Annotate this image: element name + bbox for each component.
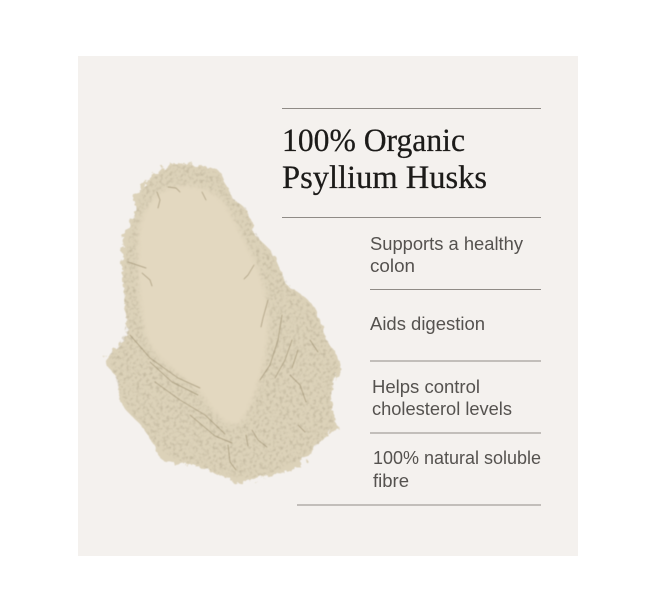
- title: 100% Organic: [282, 123, 465, 159]
- benefit: soluble fibre: fibre: [373, 471, 409, 491]
- powder cracks: [128, 187, 318, 470]
- heading rule: bottom: [282, 216, 541, 218]
- title: Psyllium Husks: [282, 160, 487, 196]
- image: psyllium powder pile: [106, 163, 341, 482]
- benefit: cholesterol: Helps control: [372, 377, 480, 397]
- benefit: soluble fibre: [297, 448, 541, 505]
- benefit: digestion: Aids digestion: [370, 314, 485, 334]
- powder grain texture: [108, 165, 339, 478]
- benefit: soluble fibre: 100% natural soluble: [373, 448, 541, 468]
- panel: background: [78, 56, 578, 556]
- title: [282, 123, 487, 196]
- benefit: cholesterol: [370, 377, 541, 433]
- benefit: cholesterol: cholesterol levels: [372, 399, 512, 419]
- benefit: healthy colon: colon: [370, 256, 415, 276]
- powder outer mound: [106, 163, 341, 482]
- smooth pressed centre: [137, 185, 268, 425]
- benefit: healthy colon: [370, 234, 541, 290]
- heading rule: top: [282, 108, 541, 110]
- benefit: healthy colon: Supports a healthy: [370, 234, 523, 254]
